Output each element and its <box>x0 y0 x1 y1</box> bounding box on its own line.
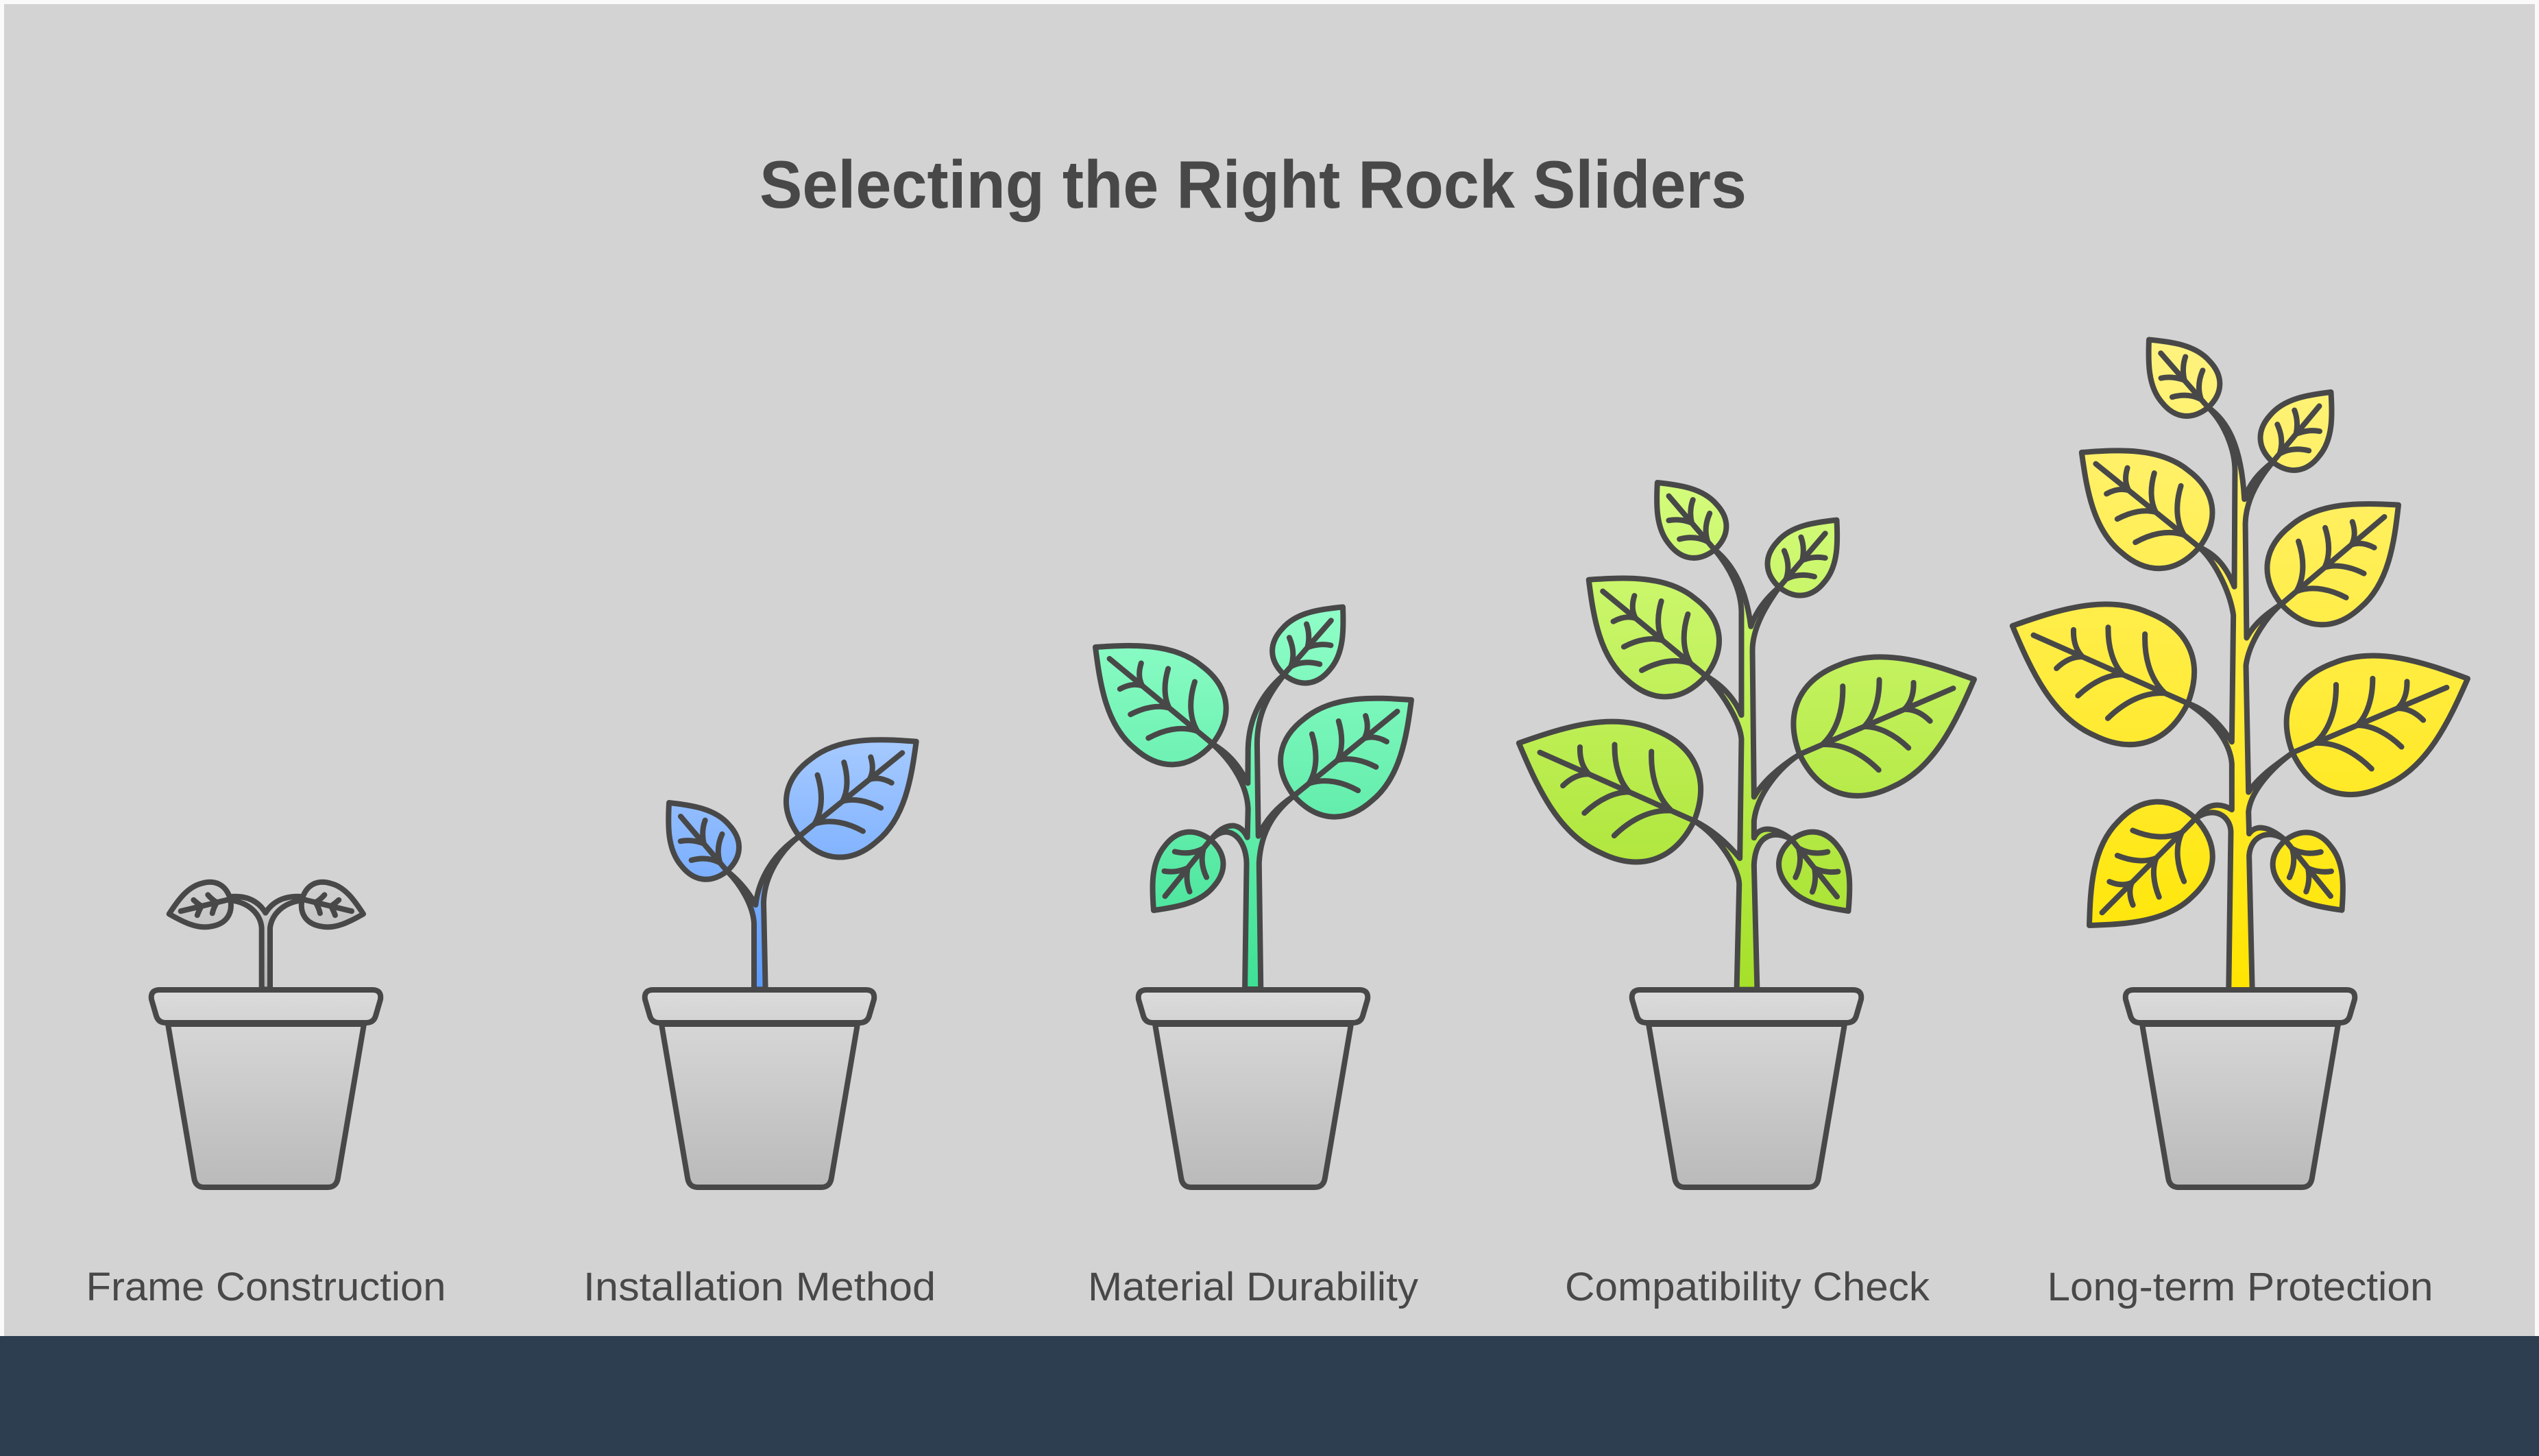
plant 4: lime plant <box>1516 480 1977 987</box>
stem 3 <box>1211 675 1293 989</box>
stem 5 <box>2188 407 2292 991</box>
leaf 1 left <box>164 877 236 936</box>
stem 4 <box>1694 550 1799 990</box>
plant 5: yellow plant <box>2010 337 2470 987</box>
pot 4 <box>1632 990 1861 1187</box>
leaf 2 big right <box>766 701 949 877</box>
plant 1: grey seedling <box>166 879 366 987</box>
plant 2: blue sprout <box>666 737 919 987</box>
plant 3: teal plant <box>1093 605 1414 987</box>
leaf 5 big right <box>2267 617 2494 814</box>
label 1: Frame Construction <box>86 1265 446 1309</box>
leaf 4 middle left <box>1555 539 1740 717</box>
pot 2 <box>645 990 874 1187</box>
leaf 5 upper left <box>2048 411 2233 589</box>
leaf 3 top <box>1260 586 1367 695</box>
leaf 4 lower right <box>1766 820 1873 931</box>
label 3: Material Durability <box>1088 1265 1418 1309</box>
stem 2 <box>727 836 799 989</box>
leaf 5 lower right <box>2261 821 2366 930</box>
pot 1 <box>151 990 380 1187</box>
leaf 4 top right <box>1756 500 1860 607</box>
pot 5 <box>2126 990 2355 1187</box>
leaf 4 big right <box>1773 618 2000 816</box>
leaf 5 upper right <box>2246 464 2433 645</box>
label 5: Long-term Protection <box>2047 1265 2433 1309</box>
leaf 4 top left <box>1633 463 1738 570</box>
leaf 5 lower left <box>2052 781 2233 962</box>
pot 3 <box>1139 990 1368 1187</box>
leaf 1 right <box>297 877 369 936</box>
leaf 3 right <box>1260 659 1445 837</box>
leaf 4 big left <box>1492 681 1721 882</box>
dark footer band <box>0 1336 2539 1456</box>
label 2: Installation Method <box>583 1265 936 1309</box>
label 4: Compatibility Check <box>1565 1265 1930 1309</box>
leaf 5 top right <box>2248 372 2355 483</box>
leaf 5 top left <box>2125 319 2232 428</box>
stem 1 <box>231 897 302 989</box>
title: Selecting the Right Rock Sliders <box>760 147 1747 222</box>
leaf 3 upper left <box>1062 606 1246 785</box>
leaf 3 lower left <box>1129 820 1235 930</box>
leaf 2 small left <box>645 782 751 891</box>
leaf 5 big left <box>1985 564 2215 765</box>
